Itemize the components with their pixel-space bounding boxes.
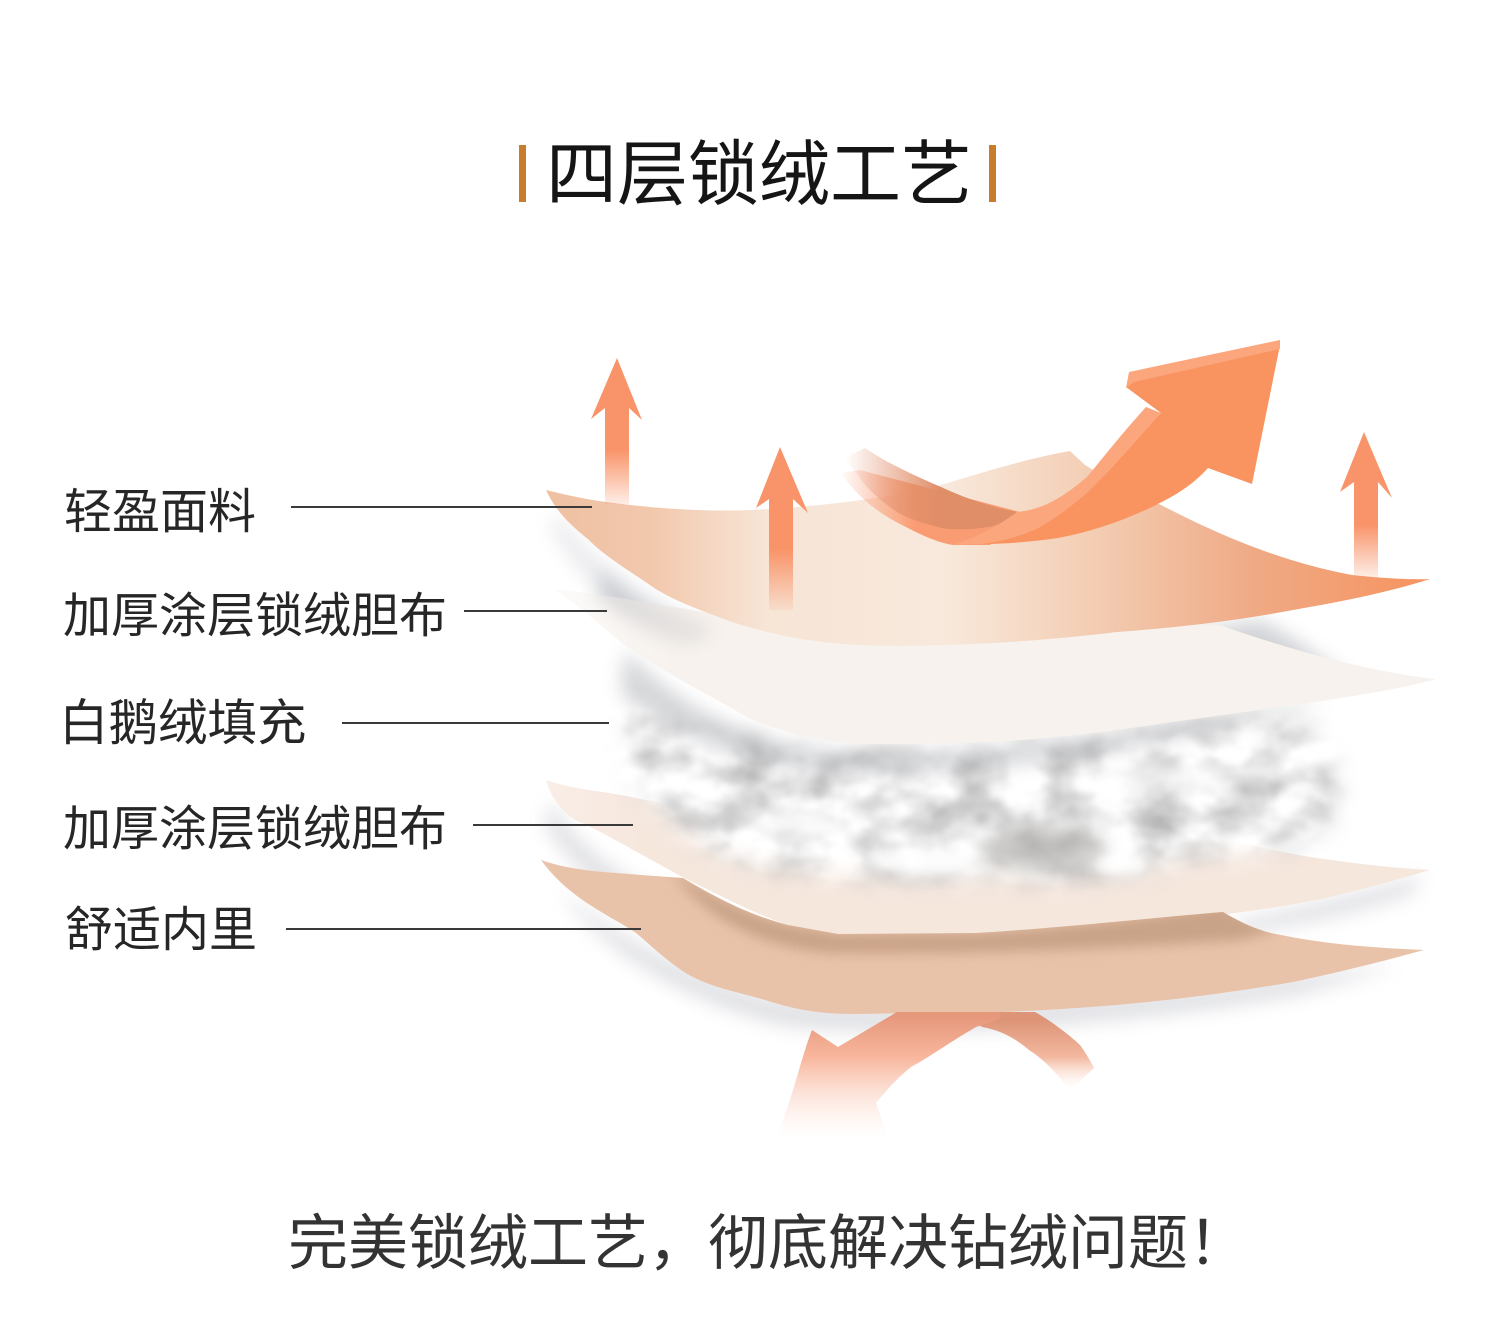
lining shaded top (670, 870, 1281, 953)
bottom caption: 完美锁绒工艺，彻底解决钻绒问题！ (288, 1210, 1248, 1277)
white goose down filling (624, 700, 1338, 882)
title: 四层锁绒工艺 (546, 136, 972, 215)
big curved arrow (841, 340, 1280, 545)
shadow under layer 1 left edge (550, 515, 715, 645)
layer 1: light outer fabric (546, 451, 1430, 646)
down: darker clump (983, 826, 1107, 874)
diagram: four-layer stack (541, 340, 1436, 1138)
arrow: pale underside band (841, 470, 1020, 545)
arrow: light side strip (953, 407, 1161, 545)
layer 2: coated down-proof fabric (555, 590, 1436, 744)
label: 轻盈面料: 轻盈面料 (64, 486, 256, 539)
shadow of lining (560, 890, 1400, 1032)
arrow: head top bevel (1126, 340, 1280, 388)
arrow: main orange face (982, 345, 1280, 544)
small up arrow left (591, 358, 642, 504)
small up arrow right (1340, 432, 1392, 578)
layer 4: comfortable lining (541, 860, 1424, 1014)
small up arrow middle (756, 447, 808, 610)
label: 白鹅绒填充: 白鹅绒填充 (59, 696, 306, 751)
down: white clumps (870, 849, 980, 875)
lower air arrow (775, 1012, 1094, 1138)
label: 加厚涂层锁绒胆布 upper: 加厚涂层锁绒胆布 (63, 590, 447, 643)
arrow: dark inner face (845, 448, 1017, 529)
shadow under layer 2 (620, 650, 1330, 774)
shadow of layer 3 (545, 800, 1425, 935)
layer 3: coated down-proof fabric (546, 780, 1430, 934)
label: 加厚涂层锁绒胆布 lower: 加厚涂层锁绒胆布 (63, 803, 447, 856)
label: 舒适内里: 舒适内里 (65, 904, 257, 957)
shadow under outer fabric (600, 570, 1350, 688)
